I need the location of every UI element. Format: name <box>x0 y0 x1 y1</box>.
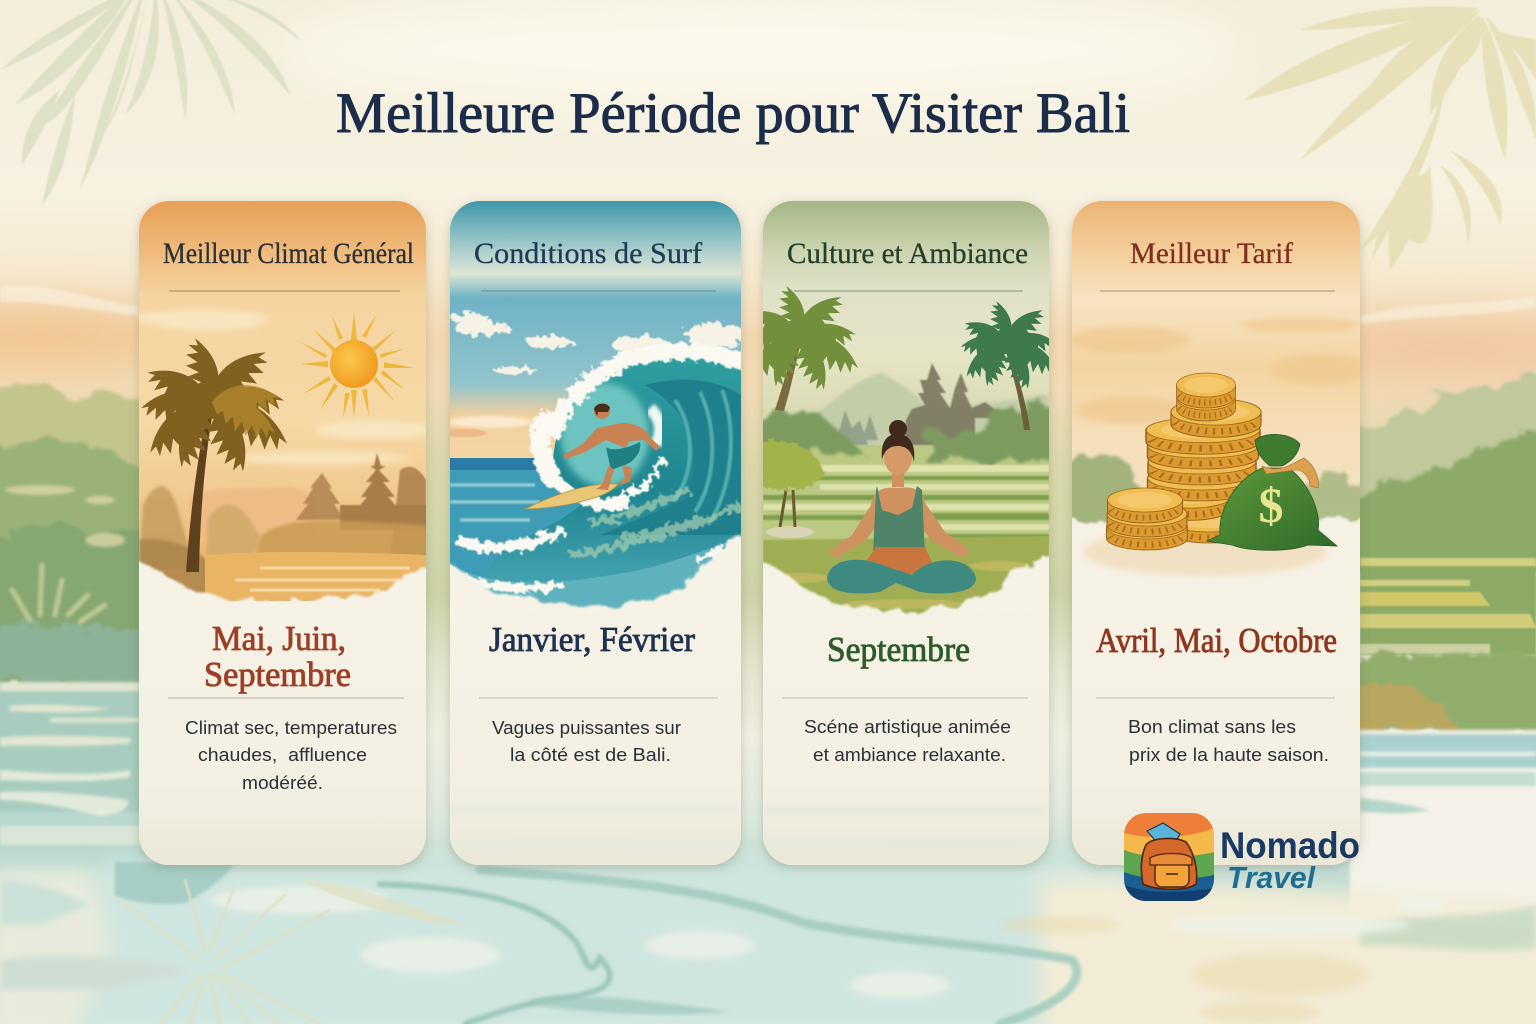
money bag <box>1255 434 1300 466</box>
pagoda <box>360 453 396 506</box>
surfboard <box>525 484 618 509</box>
description <box>492 717 681 765</box>
logo: Nomado Travel: Travel <box>1227 860 1316 895</box>
clouds at horizon <box>0 285 1536 324</box>
illustration: meditating woman in rice terraces <box>763 286 1049 616</box>
description: chaudes, affluence <box>198 744 367 765</box>
description <box>185 717 397 793</box>
surfer <box>563 423 660 459</box>
panel: conditions de surf <box>446 200 746 872</box>
logo: Nomado Travel <box>1124 813 1360 901</box>
dates: Mai, Juin, <box>212 619 346 658</box>
logo: Nomado Travel: Nomado <box>1220 825 1360 866</box>
illustration: sun, palm and temple landscape <box>130 310 435 600</box>
heading: Conditions de Surf <box>474 237 702 270</box>
icon: backpack badge <box>1124 813 1214 901</box>
illustration: gold coins and money bag: $ <box>1258 477 1284 533</box>
description: prix de la haute saison. <box>1129 744 1329 765</box>
water right <box>1350 730 1536 950</box>
water left <box>0 682 150 872</box>
description: modéréé. <box>242 772 323 793</box>
dates: Septembre <box>827 630 970 669</box>
dates: Septembre <box>204 655 351 694</box>
sun <box>300 312 414 418</box>
corner palm fronds <box>0 0 1536 270</box>
treeline left <box>0 390 170 690</box>
heading: Meilleur Climat Général <box>163 237 414 270</box>
reflected palm <box>120 880 470 1024</box>
dates: Janvier, Février <box>489 620 695 659</box>
description: Climat sec, temperatures <box>185 717 397 738</box>
panel: meilleur tarif <box>1068 200 1364 872</box>
description <box>1128 716 1329 765</box>
illustration: gold coins and money bag <box>1106 373 1337 550</box>
heading: Meilleur Tarif <box>1130 237 1293 270</box>
treeline right <box>1340 379 1536 570</box>
woman <box>829 488 970 558</box>
bush <box>780 490 795 527</box>
lower water and channels <box>0 860 1536 1024</box>
description: et ambiance relaxante. <box>813 744 1006 765</box>
heading: Culture et Ambiance <box>787 237 1028 270</box>
dates: Avril, Mai, Octobre <box>1096 621 1337 660</box>
panel: meilleur climat général <box>134 200 430 872</box>
description: Bon climat sans les <box>1128 716 1296 737</box>
panel: culture et ambiance <box>758 200 1054 872</box>
dates <box>204 619 351 694</box>
palm <box>186 418 212 572</box>
foam <box>460 351 760 588</box>
description <box>804 716 1011 765</box>
title: Meilleure Période pour Visiter Bali <box>336 82 1130 145</box>
description: Scéne artistique animée <box>804 716 1011 737</box>
illustration: surfer in wave <box>450 309 741 610</box>
description: Vagues puissantes sur <box>492 717 681 738</box>
temple <box>905 363 1000 445</box>
description: la côté est de Bali. <box>510 744 671 765</box>
palms <box>775 348 800 411</box>
